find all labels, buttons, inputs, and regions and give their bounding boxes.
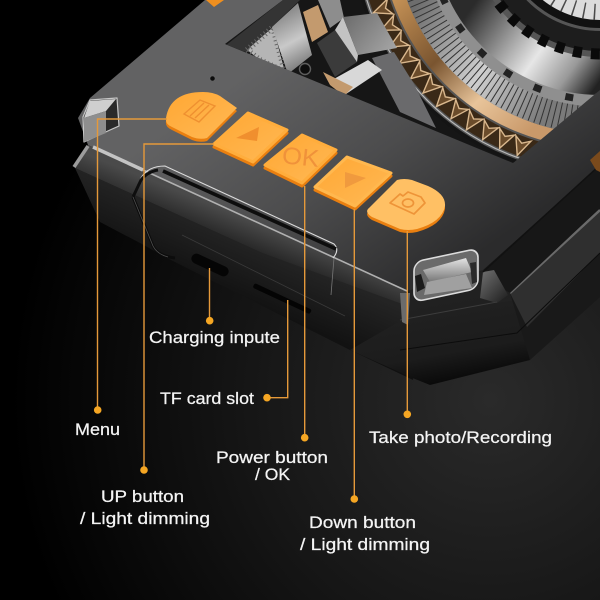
callout: up button: / Light dimming [80, 509, 210, 528]
outer ring [364, 0, 600, 160]
silver cylinder [332, 60, 382, 94]
corner nub [480, 270, 508, 303]
copper block [303, 5, 328, 42]
down button [315, 157, 391, 209]
lens hole [300, 64, 310, 74]
lower right skirt [510, 210, 600, 360]
silver ring [452, 0, 600, 76]
menu button [166, 92, 237, 142]
plate front band [75, 145, 407, 305]
bracket cube [317, 30, 357, 77]
icon: camera [390, 192, 425, 214]
ribbed steel plate [247, 28, 284, 68]
plate front bevel [93, 147, 143, 170]
up button [214, 113, 287, 165]
charging port [190, 252, 230, 278]
top plate [78, 0, 600, 291]
notched gray band [428, 0, 600, 100]
callout: TF card slot: TF card slot [160, 389, 254, 408]
callout: charging input: Charging inpute [149, 328, 280, 347]
orange top edge piece [206, 0, 224, 7]
callout: power / OK: Power button [216, 448, 328, 467]
front skirt [75, 168, 420, 380]
icon: battery menu [184, 100, 215, 122]
copper foot [323, 72, 353, 96]
TF card slot [253, 283, 312, 314]
corner light strip [400, 293, 410, 325]
OK button [265, 135, 336, 186]
chevron ring [369, 0, 539, 156]
callout: power / OK: / OK [255, 465, 291, 484]
icon: down triangle [345, 172, 366, 188]
right skirt highlight [510, 210, 600, 293]
callout: up button [80, 144, 214, 528]
camera button [367, 179, 445, 233]
copper band [392, 0, 554, 140]
callout: photo / recording [369, 231, 552, 447]
camera pinhole [210, 76, 215, 81]
corner skirt [350, 272, 530, 385]
device body [74, 0, 600, 385]
callout: TF card slot [160, 300, 288, 408]
bracket arm [372, 52, 436, 128]
ribbed band [408, 0, 600, 120]
notched black ring [487, 0, 600, 41]
callout: menu: Menu [75, 420, 120, 439]
left corner bumper [83, 98, 119, 142]
OK label: OK [281, 142, 320, 173]
callout: charging input [149, 268, 280, 347]
callout: down button: Down button [309, 513, 416, 532]
inner window wall [225, 0, 300, 52]
right corner bumper [414, 248, 478, 302]
callout: up button: UP button [101, 487, 184, 506]
inner cylinder [530, 0, 600, 28]
screen window: lens mechanism [225, 0, 600, 176]
right black band [483, 165, 600, 293]
callout: power / OK [216, 186, 328, 484]
icon: up triangle [236, 127, 259, 141]
callout: photo / recording: Take photo/Recording [369, 428, 552, 447]
callout: menu [75, 119, 167, 439]
callout: down button [300, 209, 430, 554]
callout: down button: / Light dimming [300, 535, 430, 554]
orange side piece [590, 151, 600, 172]
side rail groove [133, 166, 345, 316]
